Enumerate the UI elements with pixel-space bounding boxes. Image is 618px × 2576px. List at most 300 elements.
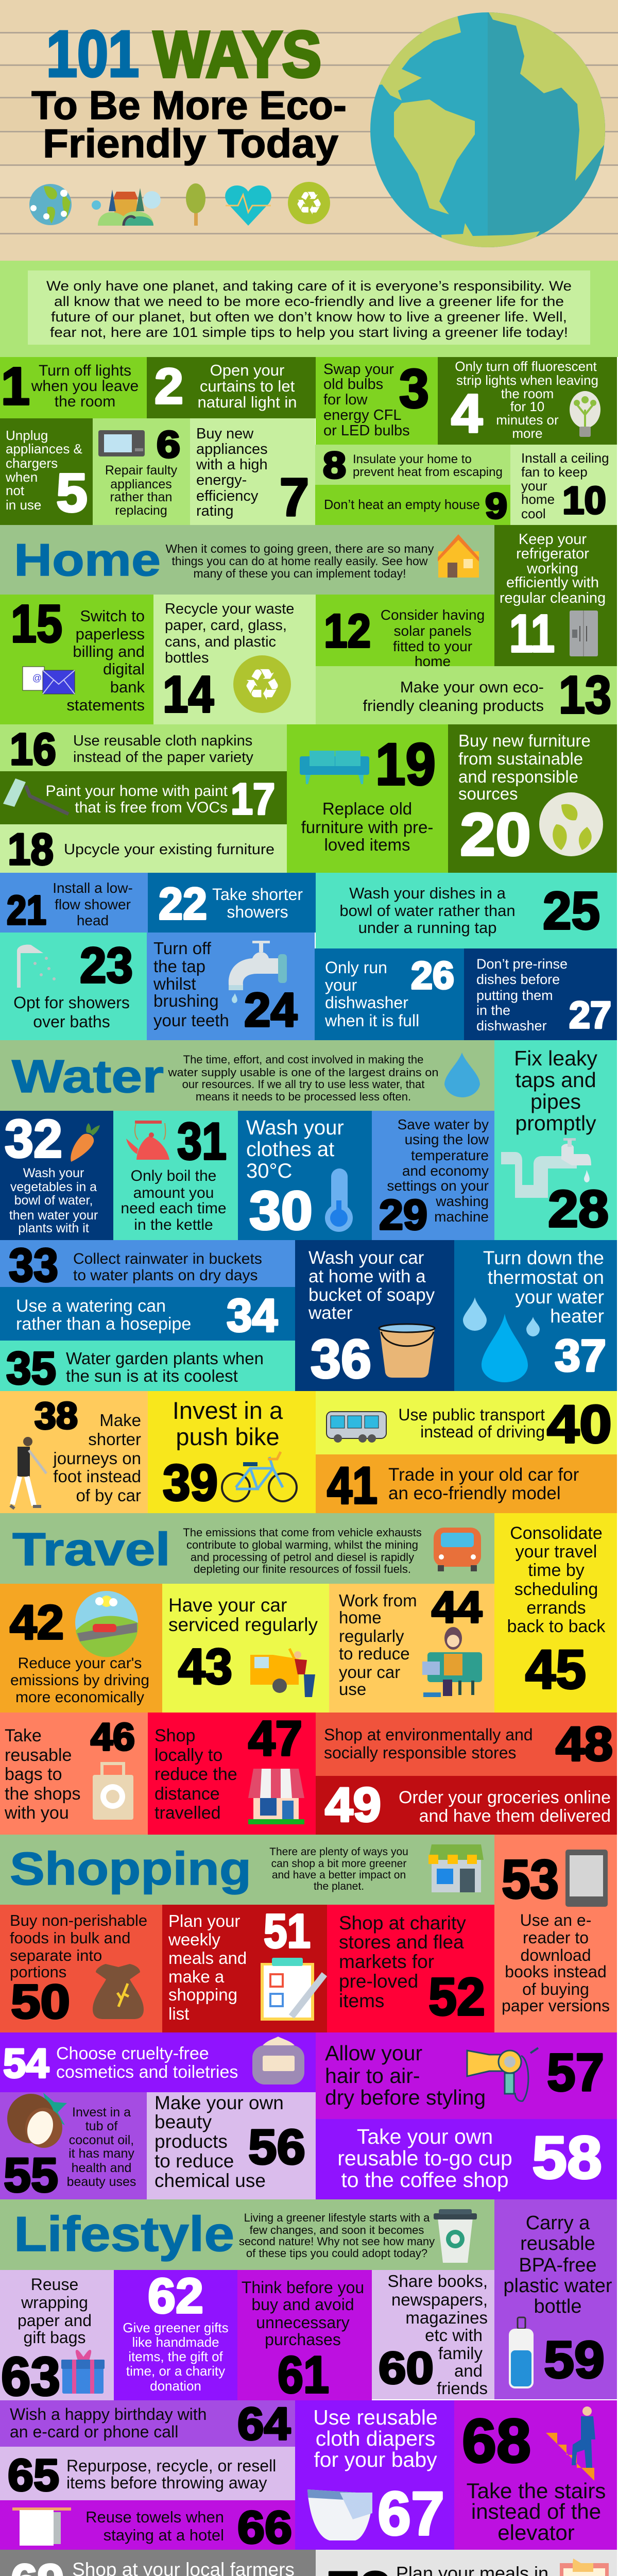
panel: tip 59 <box>494 2199 617 2399</box>
tip text: an e-card or phone call <box>10 2422 178 2441</box>
tip text: your <box>325 976 357 994</box>
tip text: reusable <box>5 1745 72 1765</box>
icon: email <box>23 667 75 694</box>
tip text: Buy non-perishable <box>10 1911 147 1929</box>
tip text: books instead <box>505 1962 607 1981</box>
icon: shop <box>428 1844 484 1892</box>
icon: takeaway cup <box>434 2209 477 2263</box>
tip text: efficiency <box>196 488 259 504</box>
panel: tip 26 <box>315 948 464 1040</box>
tip text: stores and flea <box>339 1931 464 1953</box>
intro band <box>0 261 618 357</box>
icon: kettle <box>126 1122 169 1160</box>
tip text: Work from <box>339 1591 417 1610</box>
intro text: future of our planet, but often we don’t know how to live a greener life. Well, <box>51 309 567 325</box>
tip text: furniture with pre- <box>301 818 433 837</box>
tip text: digital <box>103 660 145 678</box>
tip text: scheduling <box>514 1580 598 1599</box>
panel: tip 37 <box>454 1240 617 1391</box>
number 34: 34 <box>227 1290 278 1342</box>
icon: grain sack <box>93 1964 144 2019</box>
panel: tip 51 <box>162 1904 327 2032</box>
number 66: 66 <box>237 2501 292 2553</box>
tip text: your car <box>339 1663 400 1682</box>
tip text: push bike <box>176 1423 280 1450</box>
panel: tip 25 <box>316 873 617 948</box>
tip text: Buy new furniture <box>458 731 591 750</box>
number 1: 1 <box>1 357 30 416</box>
tip text: Make your own <box>154 2092 284 2113</box>
tip text: items before throwing away <box>66 2473 267 2492</box>
tip text: friendly cleaning products <box>363 697 544 715</box>
tip text: the shops <box>5 1784 80 1804</box>
globe illustration <box>360 12 613 252</box>
panel: tip 66 <box>0 2500 295 2553</box>
number 46: 46 <box>91 1715 135 1758</box>
number 58: 58 <box>532 2124 602 2191</box>
number 52: 52 <box>428 1967 485 2026</box>
tip text: Shop at environmentally and <box>324 1725 533 1744</box>
tip text: statements <box>66 696 145 714</box>
tip text: Water garden plants when <box>66 1349 264 1368</box>
tip text: more <box>512 426 543 441</box>
tip text: temperature <box>411 1147 489 1163</box>
icon: checklist clipboard <box>560 2558 609 2576</box>
tip text: Install a low- <box>53 880 133 896</box>
tip text: foods in bulk and <box>10 1929 130 1947</box>
tip text: paper and <box>18 2311 92 2330</box>
panel: tip 55 <box>0 2092 147 2202</box>
icon: hair dryer <box>467 2048 538 2101</box>
tip text: need each time <box>121 1200 227 1217</box>
tip text: Invest in a <box>173 1397 283 1424</box>
tip text: of buying <box>522 1980 589 1998</box>
panel: tip 10 <box>510 445 617 526</box>
tip text: dishes before <box>476 972 560 987</box>
number 37: 37 <box>555 1331 606 1381</box>
tip text: natural light in <box>197 393 297 411</box>
tip text: Trade in your old car for <box>388 1465 579 1485</box>
icon: sofa <box>300 751 369 784</box>
panel: tip 43 <box>162 1584 329 1713</box>
icon: bus <box>327 1412 386 1443</box>
tip text: working <box>526 561 578 577</box>
tip text: bottle <box>534 2296 581 2317</box>
panel: tip 58 <box>316 2119 617 2199</box>
tip text: amount you <box>133 1184 214 1201</box>
panel: tip 6 <box>93 418 190 526</box>
icon: road scene <box>75 1591 138 1657</box>
tip text: energy CFL <box>323 407 402 423</box>
tip text: then water your <box>9 1208 98 1223</box>
tip text: rather than <box>110 490 172 504</box>
tip text: reusable <box>520 2233 595 2255</box>
panel: tip 38 <box>0 1391 148 1513</box>
tip text: foot instead <box>53 1467 141 1486</box>
tip text: purchases <box>265 2330 341 2349</box>
tip text: your water <box>515 1286 604 1308</box>
tip text: plastic water <box>503 2275 612 2297</box>
section intro: The time, effort, and cost involved in making the <box>183 1053 423 1066</box>
icon: village on hills <box>92 188 161 226</box>
tip text: with you <box>4 1803 69 1823</box>
panel: tip 29 <box>372 1111 494 1240</box>
icon: diaper <box>307 2489 372 2540</box>
section heading: Lifestyle <box>0 2199 494 2270</box>
panel: tip 17 <box>0 771 287 824</box>
panel: tip 50 <box>0 1905 162 2032</box>
tip text: home <box>339 1608 382 1627</box>
number 45: 45 <box>525 1638 586 1700</box>
tip text: machine <box>434 1209 489 1225</box>
tip text: dishwasher <box>325 993 408 1012</box>
number 28: 28 <box>548 1180 609 1238</box>
number 47: 47 <box>248 1711 302 1766</box>
tip text: wrapping <box>21 2293 88 2312</box>
tip text: to the coffee shop <box>341 2168 509 2192</box>
tip text: in use <box>6 497 41 513</box>
section intro: There are plenty of ways you <box>269 1846 408 1858</box>
panel: tip 45 <box>494 1513 617 1713</box>
tip text: donation <box>150 2378 201 2394</box>
title: 101 WAYS: WAYS <box>153 18 321 91</box>
tip text: Insulate your home to <box>353 452 472 466</box>
icon: recycle badge <box>288 182 330 224</box>
tip text: Keep your <box>519 531 587 548</box>
tip text: paper, card, glass, <box>165 617 287 634</box>
tip text: Only run <box>325 958 387 977</box>
panel: tip 46 <box>0 1713 148 1835</box>
tip text: taps and <box>515 1068 596 1092</box>
panel: tip 7 <box>190 418 315 528</box>
panel: tip 15 <box>0 594 153 724</box>
panel: tip 9 <box>315 485 510 526</box>
tip text: health and <box>72 2161 131 2175</box>
tip text: bowl of water, <box>14 1193 93 1208</box>
tip text: Use public transport <box>398 1405 545 1424</box>
tip text: Turn off <box>153 939 212 958</box>
tip text: Turn off lights <box>39 362 131 379</box>
panel: tip 36 <box>295 1240 454 1391</box>
tip text: like handmade <box>132 2334 219 2350</box>
intro text: We only have one planet, and taking care of it is everyone’s responsibility. We <box>46 278 572 294</box>
icon: water drop <box>444 1053 480 1097</box>
tip text: flow shower <box>55 896 131 912</box>
tip text: Shop at charity <box>339 1912 466 1934</box>
number 8: 8 <box>323 445 346 486</box>
tip text: family <box>438 2344 483 2363</box>
number 65: 65 <box>8 2450 59 2500</box>
tip text: Consolidate <box>510 1523 603 1543</box>
tip text: distance <box>154 1784 220 1804</box>
panel: tip 19 <box>287 724 448 873</box>
panel: tip 22 <box>148 873 316 933</box>
panel: tip 52 <box>327 1905 494 2032</box>
tip text: your travel <box>516 1542 597 1562</box>
number 16: 16 <box>10 724 56 774</box>
tip text: when it is full <box>324 1011 419 1030</box>
icon: tap <box>229 941 287 1003</box>
panel: tip 20 <box>448 724 617 873</box>
tip text: coconut oil, <box>69 2133 134 2147</box>
icon: recycle: ♻ <box>243 659 282 710</box>
tip text: rating <box>196 503 234 519</box>
number 59: 59 <box>544 2331 605 2389</box>
tip text: for 10 <box>510 399 544 414</box>
tip text: of by car <box>76 1486 141 1505</box>
tip text: brushing <box>153 991 219 1010</box>
number 36: 36 <box>311 1329 371 1389</box>
tip text: fitted to your <box>393 638 472 654</box>
icon: tree <box>186 183 205 226</box>
section intro: depleting our finite resources of fossil fuels. <box>194 1563 411 1575</box>
number 29: 29 <box>379 1191 427 1239</box>
tip text: cool <box>521 506 546 521</box>
tip text: Take shorter <box>212 885 303 904</box>
panel: tip 35 <box>0 1341 295 1394</box>
tip text: magazines <box>405 2308 488 2327</box>
tip text: refrigerator <box>516 546 589 562</box>
tip text: with a high <box>196 456 268 473</box>
number 2: 2 <box>154 358 183 414</box>
section intro: and have a better impact on <box>272 1869 406 1881</box>
number 17: 17 <box>231 775 275 824</box>
number 43: 43 <box>178 1638 232 1694</box>
tip text: solar panels <box>394 623 471 639</box>
tip text: billing and <box>73 642 145 660</box>
tip text: chemical use <box>154 2170 266 2191</box>
tip text: list <box>168 2004 189 2023</box>
panel: tip 11 <box>494 525 617 666</box>
number 56: 56 <box>248 2120 305 2175</box>
tip text: your <box>521 478 547 494</box>
icon: plate of leaves <box>539 792 603 856</box>
tip text: more economically <box>15 1689 144 1706</box>
heading text: Water <box>12 1051 164 1103</box>
tip text: appliances <box>196 441 268 457</box>
tip text: the sun is at its coolest <box>66 1366 238 1385</box>
section intro: many of these you can implement today! <box>194 567 406 580</box>
tip text: time, or a charity <box>126 2363 225 2379</box>
tip text: Reduce your car's <box>18 1655 142 1672</box>
tip text: BPA-free <box>519 2255 597 2276</box>
icon: cream jar <box>252 2037 304 2084</box>
tip text: Replace old <box>322 799 412 818</box>
tip text: unnecessary <box>256 2313 350 2332</box>
tip text: shorter <box>88 1430 141 1449</box>
number 20: 20 <box>460 801 531 868</box>
tip text: Buy new <box>196 426 254 442</box>
number 14: 14 <box>163 666 214 723</box>
tip text: Plan your <box>168 1911 240 1930</box>
tip text: and responsible <box>458 767 578 786</box>
number 63: 63 <box>1 2346 60 2407</box>
tip text: journeys on <box>53 1449 141 1468</box>
tip text: Allow your <box>325 2041 422 2065</box>
tip text: and economy <box>402 1163 489 1179</box>
number 41: 41 <box>327 1457 377 1515</box>
number 40: 40 <box>547 1395 612 1454</box>
tip text: etc with <box>425 2326 483 2345</box>
tip text: Reuse <box>31 2275 78 2294</box>
title: 101 WAYS <box>46 18 321 91</box>
icon: thermometer <box>325 1168 353 1232</box>
icon: fridge <box>570 611 598 656</box>
tip text: Consider having <box>381 607 485 623</box>
tip text: Don’t heat an empty house <box>324 497 480 512</box>
panel: tip 40 <box>316 1391 617 1454</box>
tip text: water <box>308 1303 353 1323</box>
tip text: Shop <box>154 1726 195 1745</box>
tip text: Fix leaky <box>514 1046 597 1070</box>
tip text: plants with it <box>18 1221 89 1235</box>
tip text: dry before styling <box>325 2086 486 2109</box>
tip text: using the low <box>405 1131 489 1147</box>
tip text: thermostat on <box>488 1267 604 1288</box>
tip text: Choose cruelty-free <box>56 2044 209 2063</box>
tip text: Save water by <box>398 1116 489 1132</box>
number 26: 26 <box>411 954 454 997</box>
tip text: when <box>5 469 38 485</box>
tip text: energy- <box>196 472 247 488</box>
icon: car <box>434 1528 481 1571</box>
section intro: Living a greener lifestyle starts with a <box>244 2211 430 2224</box>
icon: man climbing stairs <box>546 2406 595 2481</box>
tip text: from sustainable <box>458 749 583 768</box>
tip text: markets for <box>339 1951 434 1972</box>
section intro: can shop a bit more greener <box>271 1858 406 1870</box>
icon: email: @ <box>32 673 42 683</box>
panel: tip 8 <box>315 445 510 486</box>
panel: tip 30 <box>238 1111 372 1241</box>
tip text: efficiently with <box>506 574 599 591</box>
icon: walking person <box>10 1437 46 1509</box>
tip text: items <box>339 1990 384 2011</box>
section intro: second nature! Why not see how many <box>239 2235 435 2248</box>
tip text: gift bags <box>24 2328 85 2347</box>
tip text: to reduce <box>339 1644 410 1663</box>
number 21: 21 <box>7 887 46 933</box>
panel: tip 63 <box>0 2270 114 2407</box>
tip text: to water plants on dry days <box>73 1267 258 1284</box>
tip text: Use an e- <box>520 1911 591 1929</box>
tip text: the room <box>501 386 554 401</box>
tip text: Order your groceries online <box>399 1788 611 1807</box>
tip text: cans, and plastic <box>165 634 276 650</box>
tip text: your teeth <box>153 1011 229 1030</box>
tip text: Repurpose, recycle, or resell <box>66 2456 276 2475</box>
number 53: 53 <box>502 1849 559 1910</box>
tip text: Wash your <box>23 1166 84 1180</box>
tip text: pipes <box>530 1090 581 1113</box>
tip text: showers <box>227 903 288 921</box>
number 38: 38 <box>35 1395 78 1437</box>
number 50: 50 <box>11 1975 70 2028</box>
icon: woman with laptop <box>422 1627 482 1697</box>
icon: tote bag <box>93 1764 133 1820</box>
tip text: 30°C <box>246 1160 292 1182</box>
tip text: products <box>154 2131 228 2152</box>
tip text: rather than a hosepipe <box>16 1314 191 1334</box>
number 62: 62 <box>148 2268 203 2324</box>
icon: gift box <box>61 2351 105 2394</box>
number 11: 11 <box>509 604 555 663</box>
number 6: 6 <box>157 424 180 466</box>
panel: tip 72 <box>316 2550 617 2576</box>
icon: mini globe <box>29 184 72 225</box>
icon: shower <box>17 945 56 988</box>
section intro: the planet. <box>314 1880 364 1892</box>
tip text: buy and avoid <box>251 2295 354 2314</box>
panel: tip 18 <box>0 824 287 874</box>
panel: tip 12 <box>316 595 494 669</box>
number 23: 23 <box>80 937 133 993</box>
tip text: Make your own eco- <box>400 678 544 696</box>
icon: bicycle <box>222 1452 297 1501</box>
tip text: the room <box>55 393 115 410</box>
number 60: 60 <box>379 2343 434 2393</box>
heading text: Shopping <box>10 1843 251 1895</box>
tip text: and have them delivered <box>419 1806 611 1826</box>
icon: microwave <box>98 430 145 456</box>
section intro: and processing of petrol and diesel is rapidly <box>191 1551 414 1564</box>
tip text: bowl of water rather than <box>339 902 516 920</box>
tip text: instead of the paper variety <box>73 749 253 766</box>
panel: tip 65 <box>0 2447 295 2500</box>
tip text: it has many <box>68 2146 134 2161</box>
number 39: 39 <box>163 1454 218 1511</box>
panel: tip 21 <box>0 873 148 933</box>
number 15: 15 <box>11 594 62 653</box>
number 49: 49 <box>325 1777 381 1832</box>
number 3: 3 <box>399 358 429 419</box>
panel: tip 13 <box>316 665 617 724</box>
tip text: in the kettle <box>134 1216 213 1233</box>
tip text: separate into <box>10 1946 102 1964</box>
icon: mechanic and car <box>250 1649 315 1697</box>
panel: tip 31 <box>113 1111 238 1241</box>
tip text: instead of driving <box>420 1422 545 1441</box>
number 48: 48 <box>556 1717 613 1771</box>
tip text: putting them <box>476 988 553 1003</box>
tip text: over baths <box>33 1012 110 1031</box>
tip text: Reuse towels when <box>85 2508 224 2526</box>
panel: tip 42 <box>0 1584 162 1713</box>
panel: tip 34 <box>0 1287 295 1342</box>
tip text: items, the gift of <box>128 2349 224 2364</box>
tip text: the tap <box>153 957 205 976</box>
number 10: 10 <box>562 479 606 522</box>
intro text: fear not, here are 101 simple tips to help you start living a greener life today! <box>50 325 568 340</box>
tip text: Only boil the <box>131 1167 216 1184</box>
number 55: 55 <box>4 2148 58 2202</box>
panel: tip 1 <box>0 357 147 418</box>
tip text: Take the stairs <box>467 2479 606 2503</box>
panel: tip 68 <box>454 2400 617 2550</box>
tip text: settings on your <box>387 1178 489 1194</box>
section heading: Home <box>0 525 494 595</box>
tip text: dishwasher <box>476 1018 547 1033</box>
panel: tip 39 <box>148 1391 316 1513</box>
tip text: Install a ceiling <box>521 450 609 466</box>
tip text: old bulbs <box>323 376 383 393</box>
tip text: Unplug <box>6 428 48 443</box>
number 24: 24 <box>244 983 297 1037</box>
tip text: time by <box>528 1561 585 1580</box>
intro text: all know that we need to be more eco-friendly and live a greener life for the <box>54 294 564 309</box>
tip text: heater <box>550 1306 604 1327</box>
heading text: Lifestyle <box>14 2207 234 2262</box>
